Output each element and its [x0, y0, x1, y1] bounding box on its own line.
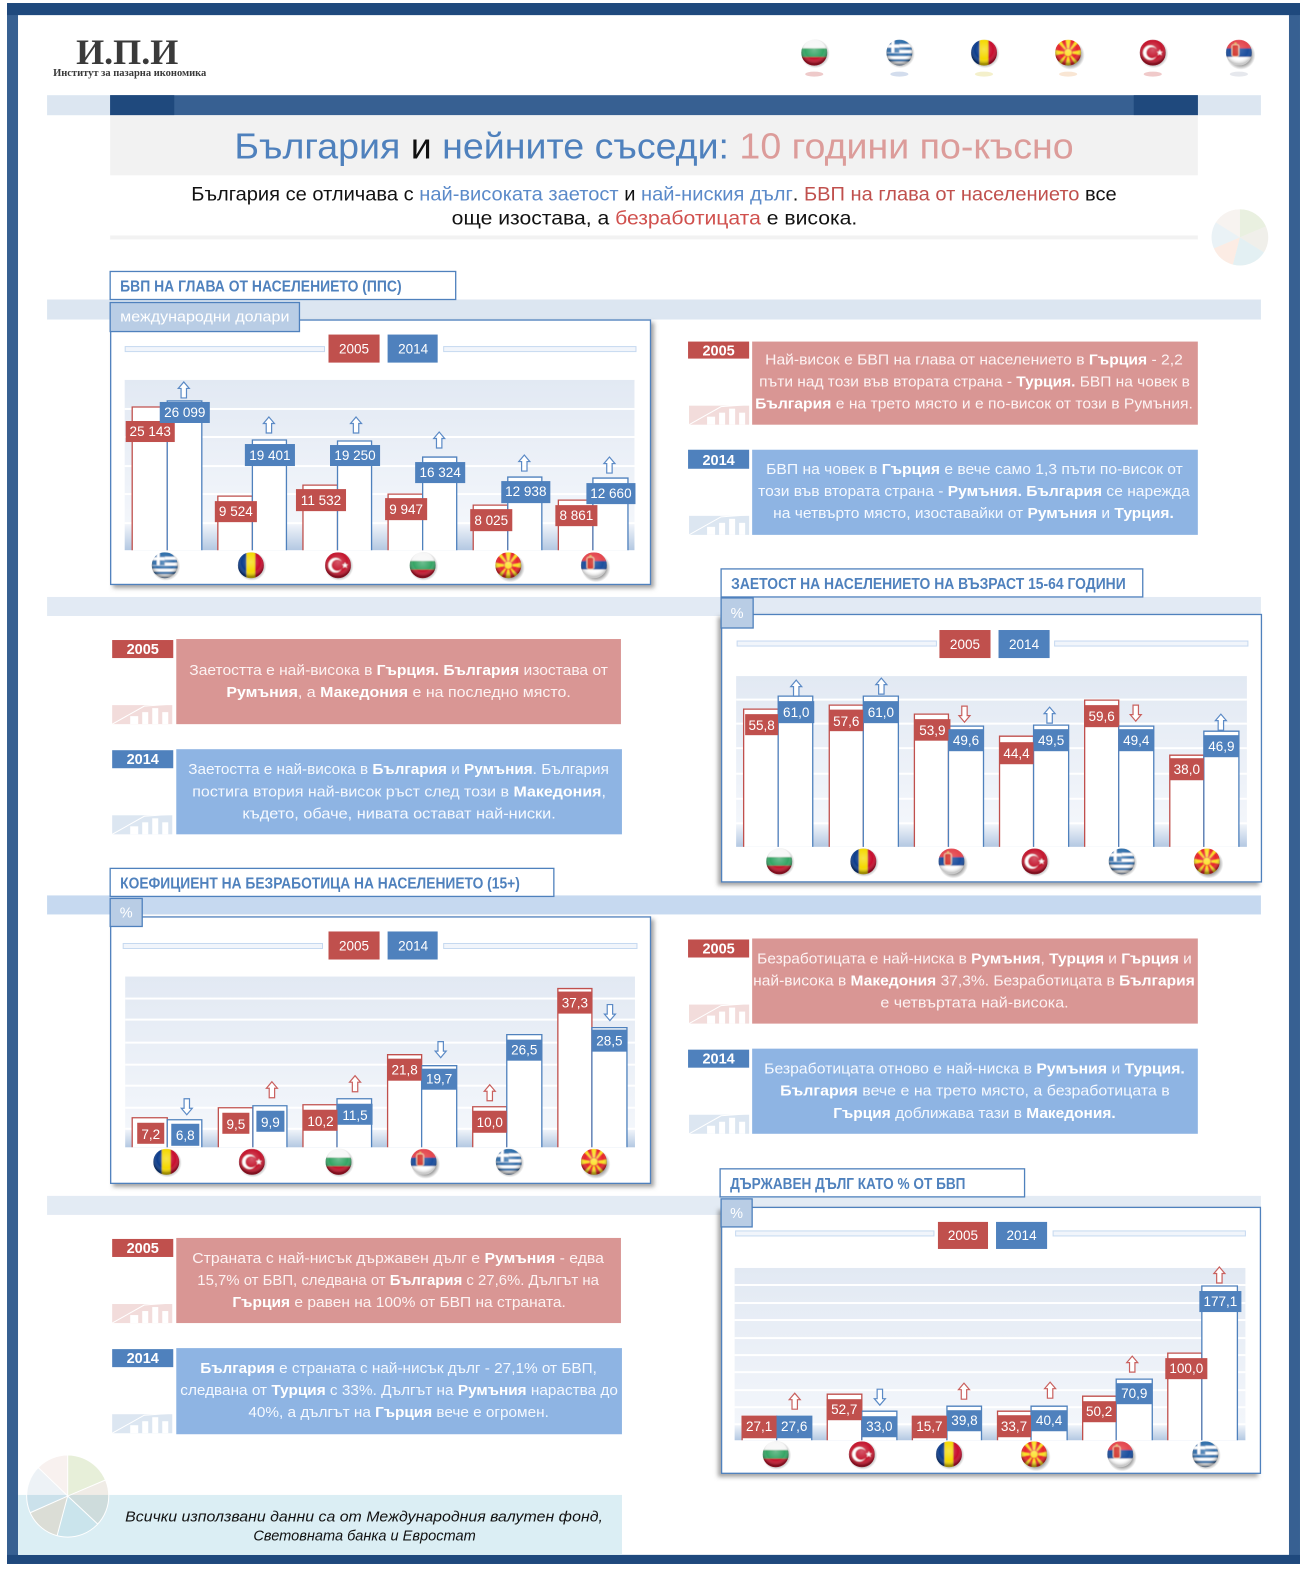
logo [53, 32, 206, 79]
bars: Serbia: 12 660 [590, 486, 632, 501]
commentary: employment 2005: Заетостта е най-висока в Гърция. България изостава от [189, 662, 608, 679]
bars: Romania [829, 678, 898, 847]
bars: Macedonia: 33,7 [1001, 1419, 1027, 1434]
title [110, 115, 1198, 175]
commentary: unemployment 2014: България вече е на трето място, а безработицата в [780, 1083, 1170, 1100]
bars: Greece: 26,5 [511, 1043, 537, 1058]
bars: Macedonia [470, 455, 550, 550]
country flags [762, 1441, 1221, 1471]
footer band [18, 1495, 622, 1555]
commentary: unemployment 2005: най-висока в Македония 37,3%. Безработицата в България [753, 973, 1195, 990]
bars: Romania: 19 401 [249, 448, 291, 463]
bars: Serbia: 70,9 [1121, 1386, 1147, 1401]
bars: Serbia: 19,7 [426, 1072, 452, 1087]
icon: flag Macedonia [1055, 40, 1085, 77]
commentary: unemployment 2014 [688, 1049, 1198, 1134]
bars: Greece: 26 099 [164, 405, 205, 420]
logo: И.П.И [76, 32, 178, 72]
icon: flag Greece [886, 39, 915, 77]
bars: Bulgaria: 9 947 [389, 502, 423, 517]
unit tab [721, 598, 753, 628]
commentary: debt 2014 [112, 1348, 622, 1434]
icon: flag Serbia [1226, 40, 1255, 77]
footer source note [125, 1508, 603, 1544]
bars: Romania: 39,8 [951, 1413, 978, 1428]
commentary: debt 2005: Гърция е равен на 100% от БВП на страната. [232, 1294, 566, 1311]
bar chart: GDP [125, 380, 635, 582]
legend: 2014 [1009, 637, 1040, 652]
commentary: employment 2005: Румъния , а Македония е на последно място. [226, 684, 571, 701]
commentary: employment 2014: постига втория най-висок ръст след този в Македония , [192, 783, 606, 800]
commentary: debt 2005: 2005 [127, 1241, 159, 1257]
legend: 2014 [398, 939, 429, 954]
intro text: още изостава, а безработицата е висока. [452, 207, 857, 229]
unit tab: % [120, 905, 133, 921]
unit tab [721, 1199, 752, 1227]
commentary: GDP 2005: пъти над този във втората страна - Турция. БВП на човек в [759, 374, 1190, 391]
commentary: debt 2005: Страната с най-нисък държавен дълг е Румъния - едва [192, 1250, 605, 1267]
legend: 2005 [950, 637, 980, 652]
bars: Turkey [1000, 707, 1069, 847]
bars: Turkey: 52,7 [831, 1402, 857, 1417]
commentary: employment 2014 [112, 749, 622, 834]
decorative pie top right [1212, 209, 1268, 265]
bars: Bulgaria [742, 1393, 812, 1440]
bars: Romania: 61,0 [868, 705, 894, 720]
bars: Romania: 7,2 [141, 1127, 160, 1142]
icon: flag Turkey [1139, 39, 1168, 77]
commentary: employment 2005: 2005 [127, 642, 159, 658]
bars: Turkey: 9,5 [226, 1117, 245, 1132]
commentary: debt 2014: следвана от Турция с 33%. Дългът на Румъния нараства до [180, 1382, 618, 1399]
intro text: България се отличава с най-високата заетост и най-ниския дълг. БВП на глава от населението все [191, 183, 1117, 205]
commentary: GDP 2014: на четвърто място, изоставайки от Румъния и Турция. [773, 505, 1174, 522]
unit tab: % [730, 1206, 743, 1222]
bars: Macedonia: 37,3 [562, 996, 588, 1011]
bars: Turkey: 19 250 [334, 448, 376, 463]
bars: Romania [215, 417, 295, 550]
bars: Serbia: 8 861 [559, 508, 593, 523]
commentary: debt 2005: 15,7% от БВП, следвана от България с 27,6%. Дългът на [197, 1272, 600, 1289]
bars: Serbia [555, 457, 635, 550]
bars: Turkey [296, 417, 380, 550]
legend [736, 1222, 1245, 1249]
bars: Macedonia: 8 025 [474, 513, 508, 528]
bars: Romania: 15,7 [916, 1419, 943, 1434]
legend: 2014 [1007, 1228, 1037, 1243]
bars: Macedonia: 38,0 [1174, 762, 1200, 777]
panel: debt chart [721, 1199, 1260, 1473]
bars: Bulgaria [385, 432, 465, 550]
heading: public debt [720, 1169, 1025, 1197]
bars: Greece: 59,6 [1089, 709, 1115, 724]
heading: employment [721, 569, 1143, 597]
legend: 2014 [398, 342, 429, 357]
commentary: GDP 2005 [688, 342, 1198, 425]
bars: Turkey: 44,4 [1003, 746, 1030, 761]
bars: Bulgaria: 27,6 [781, 1419, 807, 1434]
decorative pie bottom left [27, 1455, 109, 1537]
commentary: unemployment 2005: е четвъртата най-висока. [880, 995, 1069, 1012]
heading: GDP per capita [110, 271, 456, 300]
heading: employment: ЗАЕТОСТ НА НАСЕЛЕНИЕТО НА ВЪЗРАСТ 15-64 ГОДИНИ [731, 575, 1126, 593]
bars: Turkey: 33,0 [866, 1419, 893, 1434]
flags row [801, 39, 1255, 77]
icon: flag Romania [970, 39, 1000, 77]
commentary: GDP 2014: този във втората страна - Румъния. България се нарежда [758, 483, 1190, 500]
bars: Serbia: 50,2 [1086, 1404, 1112, 1419]
bars: Serbia [914, 706, 984, 847]
panel: unemployment chart [110, 898, 650, 1183]
bars: Greece [1085, 700, 1154, 847]
commentary: debt 2005 [112, 1238, 621, 1323]
bars: Turkey [218, 1082, 287, 1147]
commentary: employment 2014: 2014 [127, 752, 159, 768]
commentary: employment 2014: Заетостта е най-висока в България и Румъния. България [188, 761, 609, 778]
bars: Macedonia [1170, 714, 1239, 847]
unit tab [110, 898, 142, 926]
commentary: debt 2014: България е страната с най-нисък дълг - 27,1% от БВП, [200, 1360, 597, 1377]
commentary: GDP 2005: България е на трето място и е по-висок от този в Румъния. [755, 396, 1193, 413]
bars: Turkey: 11 532 [301, 493, 341, 508]
country flags [153, 1148, 610, 1179]
bars: Bulgaria: 11,5 [342, 1108, 368, 1123]
commentary: GDP 2014: БВП на човек в Гърция е вече само 1,3 пъти по-висок от [766, 461, 1183, 478]
bars: Macedonia: 28,5 [596, 1034, 623, 1049]
commentary: GDP 2014: 2014 [702, 453, 735, 469]
commentary: debt 2014: 2014 [127, 1351, 159, 1367]
bar chart: debt [735, 1222, 1245, 1471]
legend [125, 335, 636, 363]
legend: 2005 [948, 1228, 978, 1243]
legend: 2005 [339, 939, 369, 954]
heading: unemployment [110, 868, 554, 896]
bars: Bulgaria [303, 1076, 373, 1147]
bars: Greece: 10,0 [477, 1115, 503, 1130]
plot background [125, 380, 634, 550]
bars: Turkey [827, 1389, 897, 1440]
bars: Serbia [388, 1042, 457, 1147]
logo: Институт за пазарна икономика [53, 68, 206, 79]
unit tab: % [731, 606, 744, 622]
commentary: unemployment 2005: Безработицата е най-ниска в Румъния, Турция и Гърция и [757, 951, 1192, 968]
bars: Turkey: 49,5 [1038, 733, 1064, 748]
unit tab: международни долари [120, 310, 289, 326]
plot background [125, 977, 635, 1147]
bars: Macedonia [997, 1382, 1067, 1440]
heading: public debt: ДЪРЖАВЕН ДЪЛГ КАТО % ОТ БВП [730, 1175, 965, 1193]
commentary: unemployment 2005 [688, 938, 1198, 1024]
panel: employment chart [721, 598, 1261, 882]
commentary: unemployment 2014: Гърция доближава тази в Македония. [833, 1105, 1116, 1122]
bars: Greece: 49,4 [1123, 733, 1150, 748]
bars: Serbia: 49,6 [953, 733, 979, 748]
section bands [47, 300, 1261, 1215]
bars: Greece [473, 1035, 542, 1147]
bars: Romania [912, 1383, 982, 1440]
title: България и нейните съседи: 10 години по-късно [234, 125, 1074, 166]
heading: GDP per capita: БВП НА ГЛАВА ОТ НАСЕЛЕНИЕТО (ППС) [120, 277, 402, 295]
bars: Macedonia [558, 989, 627, 1147]
legend [737, 630, 1248, 658]
panel: GDP chart [110, 303, 650, 584]
bars: Greece: 177,1 [1203, 1294, 1237, 1309]
country flags [151, 552, 610, 582]
commentary: GDP 2005: 2005 [702, 344, 735, 360]
bars: Romania: 9 524 [219, 504, 253, 519]
country flags [766, 848, 1223, 878]
bars: Bulgaria: 61,0 [783, 705, 809, 720]
bars: Greece [126, 382, 210, 550]
bars: Macedonia: 46,9 [1208, 739, 1235, 754]
bars: Bulgaria: 27,1 [746, 1419, 772, 1434]
commentary: unemployment 2014: 2014 [702, 1052, 735, 1068]
heading: unemployment: КОЕФИЦИЕНТ НА БЕЗРАБОТИЦА НА НАСЕЛЕНИЕТО (15+) [120, 874, 520, 892]
commentary: GDP 2005: Най-висок е БВП на глава от населението в Гърция - 2,2 [765, 352, 1183, 369]
icon: flag Bulgaria [801, 39, 830, 77]
bars: Romania [132, 1099, 202, 1147]
bars: Serbia: 21,8 [391, 1063, 418, 1078]
bars: Bulgaria [744, 680, 814, 847]
bars: Greece: 25 143 [130, 424, 171, 439]
bars: Romania: 6,8 [176, 1128, 195, 1143]
commentary: employment 2014: където, обаче, нивата остават най-ниски. [242, 805, 556, 822]
bars: Bulgaria: 10,2 [307, 1114, 334, 1129]
intro text [110, 183, 1198, 239]
header ribbon [47, 95, 1261, 115]
bars: Serbia: 53,9 [919, 723, 946, 738]
bars: Greece [1165, 1267, 1241, 1440]
bars: Turkey: 9,9 [261, 1115, 280, 1130]
bars: Serbia [1082, 1356, 1152, 1440]
commentary: employment 2005 [112, 639, 621, 724]
legend [123, 931, 637, 960]
commentary: unemployment 2005: 2005 [702, 942, 735, 958]
commentary: debt 2014: 40%, а дългът на Гърция вече е огромен. [248, 1404, 549, 1421]
plot background [735, 1268, 1245, 1440]
bars: Macedonia: 40,4 [1036, 1413, 1063, 1428]
commentary: GDP 2014 [688, 450, 1198, 535]
bars: Bulgaria: 55,8 [749, 718, 775, 733]
footer source note: Всички използвани данни са от Международния валутен фонд, [125, 1508, 603, 1525]
bars: Macedonia: 12 938 [505, 484, 546, 499]
bars: Bulgaria: 16 324 [420, 465, 461, 480]
plot background [736, 676, 1247, 847]
footer source note: Световната банка и Евростат [253, 1527, 476, 1544]
bars: Greece: 100,0 [1169, 1361, 1203, 1376]
bars: Romania: 57,6 [833, 714, 859, 729]
unit tab [110, 303, 299, 332]
legend: 2005 [339, 342, 369, 357]
commentary: unemployment 2014: Безработицата отново е най-ниска в Румъния и Турция. [764, 1061, 1185, 1078]
